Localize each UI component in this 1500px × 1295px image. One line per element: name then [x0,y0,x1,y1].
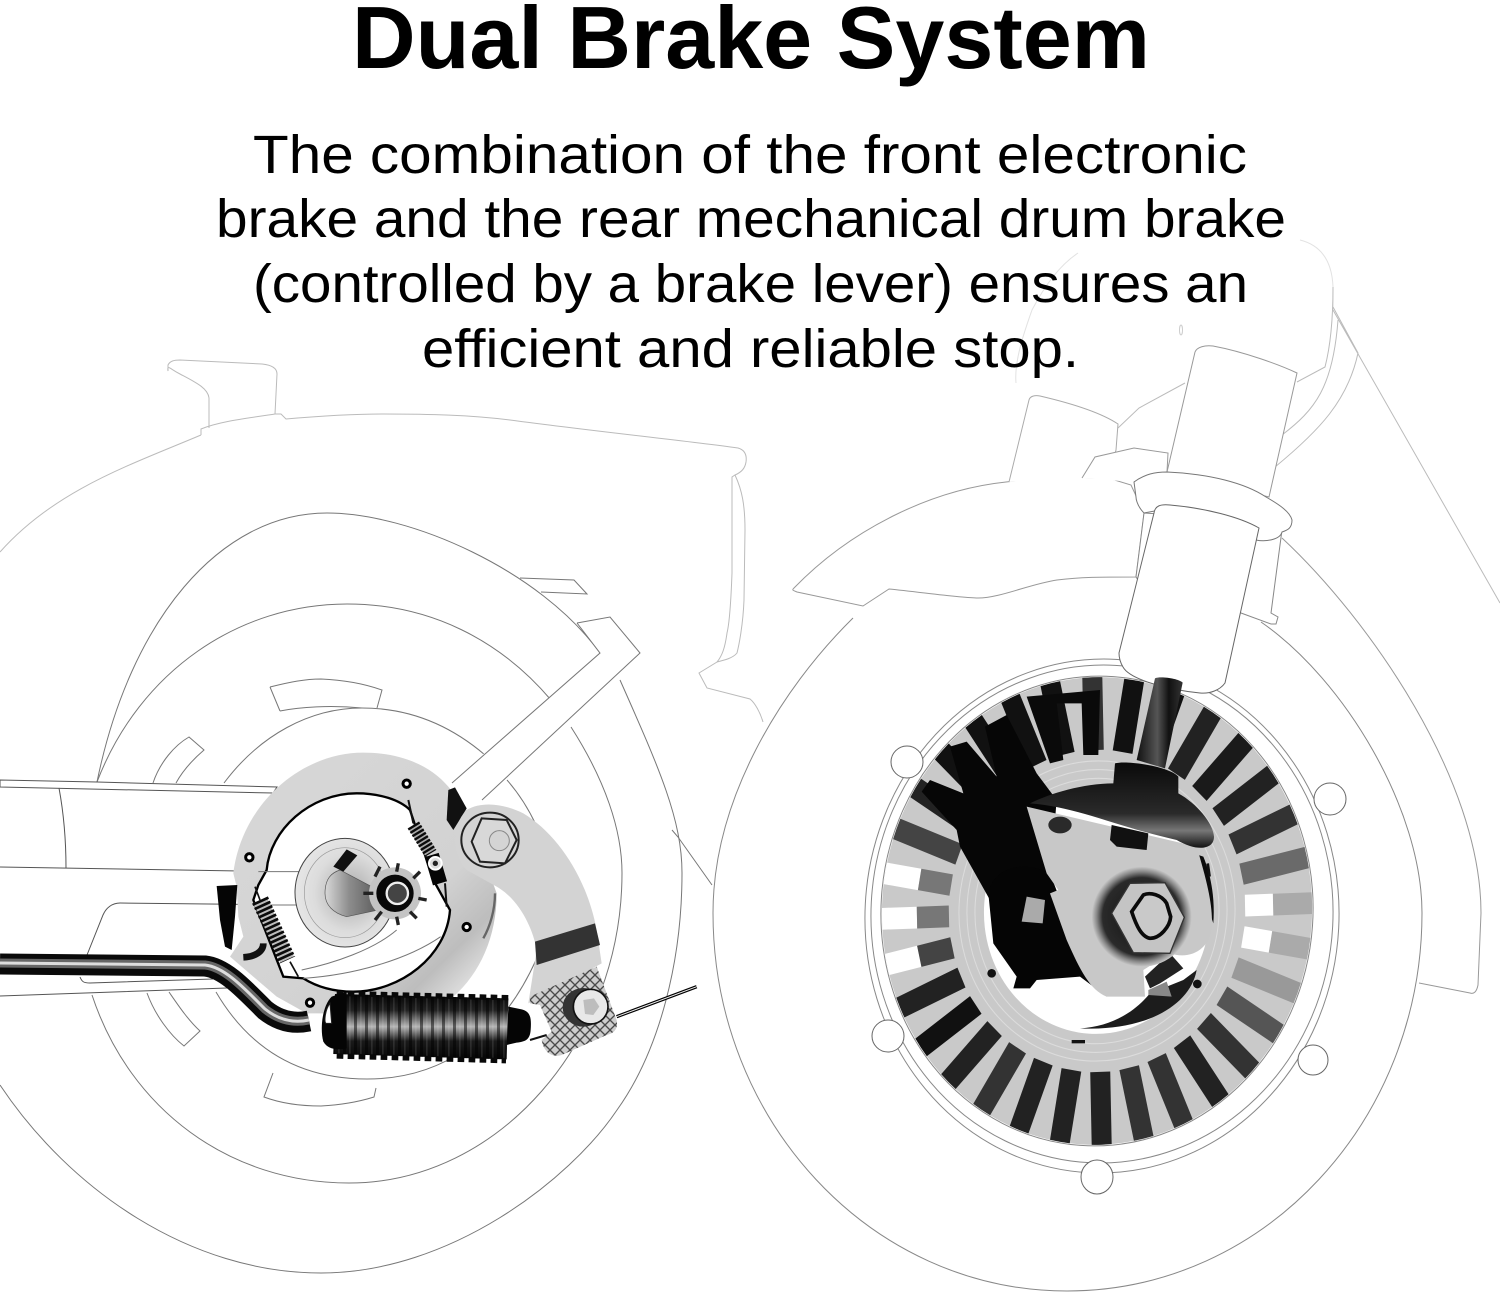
rear fork tube [1009,396,1118,482]
hub inner ring [304,848,386,938]
axle [325,870,378,917]
socket cap screw [563,988,608,1027]
front wheel line drawing [713,478,1481,1291]
rim spoke windows [147,578,712,1106]
axle pin [333,849,357,872]
swing arm body lines [0,788,297,996]
drum mounting circles [872,746,1346,1194]
black wedge top [447,787,467,830]
backing plate [230,753,497,1013]
fork right leg [1136,513,1282,624]
arm bolt [461,813,519,867]
rear wheel line drawing [0,360,763,1273]
rear mechanical drum brake [217,753,697,1061]
description text [216,125,1286,379]
brake arm [455,804,602,1003]
line 3: (controlled by a brake lever) ensures an [253,254,1248,314]
bolt head [1132,894,1171,938]
small oval mark [1180,325,1182,335]
front brake mechanism [922,677,1214,1043]
line 1: The combination of the front electronic [253,125,1247,185]
head tube cables [1118,287,1500,603]
black left bracket [217,885,237,950]
gray brake bracket plate [1027,807,1212,997]
front electronic brake stator [882,677,1312,1145]
swing arm lever to brake [450,617,640,805]
rear tyre outer ring [0,513,682,1273]
nut [376,875,414,912]
brake cable housing [0,963,309,1022]
bearing [1092,867,1192,967]
brake cable [617,987,697,1017]
black clip [243,943,263,957]
lower fork tube [1119,505,1259,693]
drum hub [295,838,395,947]
plate shading sliver [483,893,495,938]
brake drum rings [852,647,1352,1185]
front fender rear part [793,478,1144,606]
front fender forward part [1282,538,1481,993]
hex nut [1112,883,1184,953]
swing arm lines through opening [258,872,441,978]
cap bolt left [1048,817,1072,833]
plate mounting holes [246,780,470,1006]
upper tube [1167,346,1297,497]
stator concentric rings [949,752,1245,1070]
cap bolts [1110,825,1148,850]
drilled dots and marks [987,863,1211,1043]
front tyre [713,618,1422,1291]
star washer [363,863,427,925]
line 4: efficient and reliable stop. [422,319,1079,379]
dark bracket tab [1145,953,1183,988]
dark crescent inside opening [1080,970,1197,1029]
black smear over upper slots [1027,690,1100,763]
dark sliver right of plate [1183,850,1214,923]
hub bright window [1022,897,1045,923]
rear rim inner ring [216,708,536,1079]
vertical shaft [1137,677,1183,768]
stator centre opening [976,780,1218,1042]
gray tab lower [1148,982,1172,997]
return coil spring [322,992,547,1061]
rear seat bump and fender [0,360,763,722]
knurled end plate [530,967,617,1056]
faint upper frame [1016,240,1333,383]
plate opening [253,793,450,992]
arm black stripe [535,923,600,965]
fork collar [1134,472,1292,541]
swing arm lever outline [452,617,640,800]
inner black hub mass [988,867,1107,997]
black smear over upper left slots [922,715,1057,900]
front fork and upper frame outlines [1009,240,1500,693]
caliper cap disc [1030,762,1214,848]
upper spring [408,800,447,907]
rear rim middle ring [92,604,622,1183]
fork bracket [1082,448,1168,482]
rear swing arm [0,780,277,793]
left spring [255,887,298,977]
stator slots [882,677,1312,1145]
line 2: brake and the rear mechanical drum brake [216,189,1286,249]
